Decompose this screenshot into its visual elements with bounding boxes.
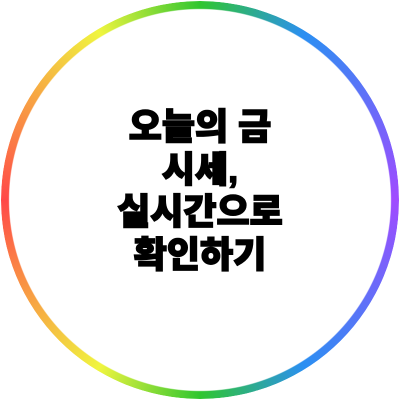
title <box>117 106 283 274</box>
title: 확인하기 <box>134 234 266 274</box>
title: 오늘의 금 <box>129 106 271 147</box>
title: 실시간으로 <box>117 191 283 232</box>
title: 시세, <box>162 148 238 190</box>
